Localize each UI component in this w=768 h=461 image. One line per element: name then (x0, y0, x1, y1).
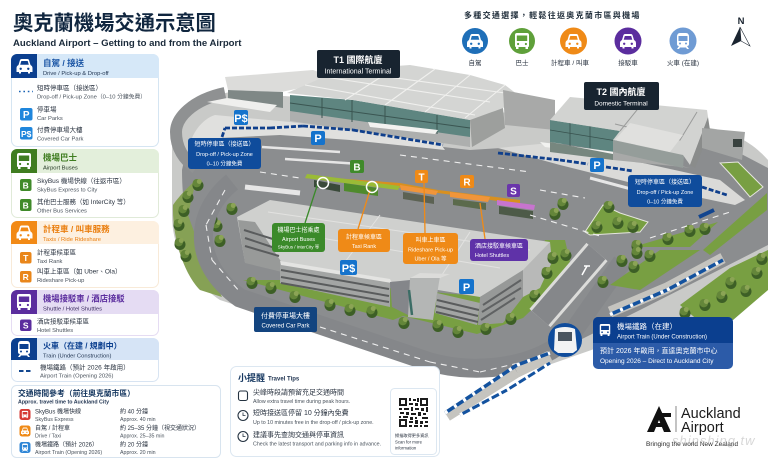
legend: covered car park: 付費停車場大樓 (37, 125, 83, 134)
subtitle: Auckland Airport – Getting to and from the Airport (13, 38, 242, 49)
legend: drop-off zone (19, 83, 146, 100)
row: SkyBus: 約 40 分鐘 (120, 408, 148, 416)
marker: P$ car park: P$ (342, 263, 355, 275)
label: drop-off zone left: Drop-off / Pick-up Zone (196, 152, 253, 158)
label: airport buses: SkyBus / InterCity 等 (278, 244, 320, 250)
rail white ticks (445, 260, 723, 415)
QR box: information (395, 446, 417, 450)
islands and trees right side (550, 162, 767, 255)
legend: airport train: 機場鐵路（預計 2026 年啟用） (40, 362, 130, 372)
airport map illustration (172, 65, 768, 374)
car park surrounding lawn (243, 240, 570, 334)
label: drop-off zone left: 0–10 分鐘免費 (207, 160, 243, 168)
panel: buses: Airport Buses (43, 166, 78, 172)
legend: taxi rank (20, 248, 76, 265)
tip 1 (238, 388, 350, 405)
label: covered car park (254, 307, 317, 332)
legend: other buses: B (23, 200, 29, 210)
icon: train (667, 28, 699, 67)
callout: airport train: Opening 2026 – Direct to Auckland City (600, 358, 714, 365)
callout: airport train (593, 317, 733, 369)
label: T1 International Terminal (317, 50, 400, 78)
stair tower (408, 276, 440, 320)
legend: car parks: 停車場 (37, 104, 57, 114)
label: airport buses: 機場巴士搭乘處 (277, 226, 320, 234)
marker: P T2 (590, 158, 604, 172)
label: rideshare pick-up: 叫車上車區 (415, 236, 446, 244)
legend: hotel shuttles: Hotel Shuttles (37, 328, 73, 334)
lawn and trees lower right (598, 247, 768, 322)
tip 1: Allow extra travel time during peak hours. (253, 399, 350, 405)
dashed route T2 (498, 153, 727, 195)
QR box: Scan for more (395, 440, 423, 444)
land base (172, 92, 768, 374)
panel: train: 火車（在建 / 規劃中） (43, 340, 122, 350)
lane markings (245, 147, 650, 194)
ramp road (540, 252, 597, 318)
legend: drop-off zone: 短時停車區（接送區） (37, 83, 102, 92)
heading: transport options: 多種交通選擇，輕鬆往返奧克蘭市區與機場 (464, 10, 641, 20)
callout: airport train: Airport Train (Under Construction) (617, 334, 707, 340)
legend: taxi rank: Taxi Rank (37, 259, 63, 265)
panel: taxis: 計程車 / 叫車服務 (43, 224, 110, 234)
tip 3 (238, 430, 381, 448)
marker: T: T (418, 172, 425, 184)
row: drive (20, 424, 200, 440)
ring road around car park (203, 182, 622, 368)
T2 domestic terminal building (540, 97, 745, 168)
label: T1 International Terminal: T1 國際航廈 (333, 54, 383, 65)
label: rideshare pick-up (403, 233, 458, 264)
T1 canopy (368, 122, 438, 134)
covered car park building (237, 200, 552, 325)
label: hotel shuttles (470, 239, 528, 261)
roof deck (237, 200, 550, 297)
icon: shuttle (614, 28, 642, 67)
legend: rideshare: Rideshare Pick-up (37, 278, 84, 284)
panel: buses (11, 149, 159, 218)
marker: P$ T1: P$ (234, 113, 248, 125)
right block (435, 293, 480, 325)
row: drive: 約 25–35 分鐘（視交通狀況） (120, 424, 200, 432)
legend: rideshare (20, 266, 122, 284)
panel: travel tips: Travel Tips (268, 376, 300, 382)
label: rideshare pick-up: Uber / Ola 等 (414, 254, 447, 262)
icon: bus: 巴士 (516, 58, 529, 67)
panel: train (11, 338, 159, 382)
label: drop-off zone right: 短時停車區（接送區） (635, 178, 695, 186)
row: train: Airport Train (Opening 2026) (35, 450, 102, 456)
Auckland Airport logo (646, 406, 741, 448)
legend: SkyBus (20, 176, 126, 194)
panel: drive (11, 54, 159, 146)
icon: drive (462, 28, 488, 67)
tip 3: 建議事先查詢交通與停車資訊 (253, 430, 344, 439)
road surface (182, 124, 768, 362)
row: drive: Approx. 25–35 min (120, 434, 165, 440)
T1 international terminal building (287, 65, 522, 147)
marker: R (460, 175, 474, 188)
watermark: shinshing.tw (672, 433, 756, 448)
panel: train: Train (Under Construction) (43, 354, 111, 360)
legend: covered car park: Covered Car Park (37, 136, 83, 142)
QR box (390, 388, 436, 454)
panel: shuttles: Shuttle / Hotel Shuttles (43, 306, 102, 312)
left block (238, 220, 282, 272)
row: train (20, 440, 156, 456)
panel: shuttles (11, 290, 159, 336)
marker: B: B (353, 162, 361, 174)
callout: airport train: 機場鐵路（在建） (617, 321, 677, 331)
legend: hotel shuttles (20, 316, 90, 334)
marker: P$ car park (340, 260, 357, 275)
train icon circle (548, 323, 582, 357)
two-way arrow (699, 210, 714, 217)
QR code (399, 398, 428, 427)
label: drop-off zone right: 0–10 分鐘免費 (647, 198, 683, 206)
label: T2 Domestic Terminal (584, 82, 659, 110)
tip 3: Check the latest transport and parking info in advance. (253, 442, 381, 448)
row: train: 約 20 分鐘 (120, 440, 148, 448)
marker: S: S (510, 186, 517, 198)
Auckland Airport logo: Auckland (681, 406, 741, 422)
rail line lower (460, 363, 550, 415)
label: hotel shuttles: 酒店接駁車候車區 (475, 242, 523, 250)
label: T1 International Terminal: International Terminal (325, 68, 392, 76)
legend: rideshare: R (23, 272, 29, 282)
left lawn with trees (173, 179, 238, 297)
callout lines (305, 178, 485, 239)
panel: taxis (11, 221, 159, 288)
icon: train: 火車 (在建) (667, 58, 699, 67)
marker: P car park (459, 279, 474, 294)
label: covered car park: Covered Car Park (261, 324, 311, 330)
legend: SkyBus: SkyBus 機場快線（往返市區） (37, 176, 126, 185)
QR box: 掃描取得更多資訊 (395, 432, 429, 439)
label: T2 Domestic Terminal: T2 國內航廈 (596, 86, 646, 97)
row: train: Approx. 20 min (120, 450, 156, 456)
legend: airport train (19, 362, 130, 380)
legend: other buses (20, 197, 130, 214)
label: airport buses (272, 223, 325, 252)
rail track bed (447, 258, 723, 416)
legend: other buses: 其他巴士服務（如 InterCity 等） (37, 197, 130, 206)
north arrow (731, 16, 750, 46)
marker: P T1: P (314, 133, 322, 145)
tip 1: 尖峰時段請預留充足交通時間 (253, 388, 344, 396)
icon: bus (509, 28, 535, 67)
bus stops (305, 174, 535, 219)
panel: travel times: 交通時間參考（前往奧克蘭市區） (18, 388, 135, 398)
icon: shuttle: 接駁車 (618, 58, 638, 67)
label: hotel shuttles: Hotel Shuttles (475, 253, 509, 259)
marker: P T1 (311, 131, 325, 145)
row: SkyBus: SkyBus Express (35, 417, 74, 423)
T2 forecourt (498, 143, 745, 205)
label: drop-off zone left: 短時停車區（接送區） (194, 140, 255, 148)
trees around car park (246, 249, 572, 338)
tip 2 (238, 408, 374, 426)
row: train: 機場鐵路（預計 2026） (35, 440, 98, 448)
title: 奧克蘭機場交通示意圖 (13, 11, 216, 35)
north arrow: N (738, 16, 745, 27)
Auckland Airport logo: Airport (681, 420, 724, 436)
centre deck (280, 263, 390, 307)
marker: P T2: P (593, 160, 601, 172)
label: taxi rank: 計程車候車區 (346, 233, 382, 241)
left canopy (207, 98, 277, 112)
marker: R: R (463, 178, 471, 188)
panel: travel times (12, 386, 220, 458)
Auckland Airport logo: Bringing the world New Zealand (646, 441, 739, 448)
label: rideshare pick-up: Rideshare Pick-up (408, 248, 453, 254)
legend: hotel shuttles: S (23, 320, 29, 330)
panel: shuttles: 機場接駁車 / 酒店接駁 (43, 294, 125, 304)
panel: travel times: Approx. travel time to Auckland City (18, 400, 109, 406)
marker: B (350, 160, 364, 174)
label: airport buses: Airport Buses (282, 237, 315, 243)
legend: car parks (20, 104, 63, 122)
legend: rideshare: 叫車上車區（如 Uber、Ola） (37, 266, 122, 276)
icon: taxi: 計程車 / 叫車 (551, 58, 589, 67)
legend: covered car park: P$ (21, 129, 32, 139)
forecourt plaza (192, 115, 445, 150)
callout: airport train: 預計 2026 年啟用，直達奧克蘭市中心 (600, 346, 717, 355)
dashed route T1 (222, 126, 443, 145)
legend: car parks: Car Parks (37, 116, 63, 122)
icon: taxi (551, 28, 589, 67)
T1 connector block (503, 90, 555, 130)
label: drop-off zone left (188, 138, 261, 169)
upper left curved road (176, 93, 225, 168)
legend: car parks: P (23, 110, 30, 121)
legend: other buses: Other Bus Services (37, 208, 87, 214)
rail line upper (445, 260, 723, 413)
row: drive: Drive / Taxi (35, 434, 61, 440)
legend: covered car park (20, 125, 83, 142)
legend: SkyBus: B (23, 180, 29, 190)
legend: taxi rank: T (23, 253, 29, 263)
legend: hotel shuttles: 酒店接駁車候車區 (37, 316, 90, 326)
panel: taxis: Taxis / Ride Rideshare (43, 237, 101, 243)
panel: drive: 自駕 / 接送 (43, 58, 85, 68)
row: SkyBus (20, 408, 156, 423)
panel: drive: Drive / Pick-up & Drop-off (43, 71, 109, 77)
legend: drop-off zone: Drop-off / Pick-up Zone（0–10 分鐘免費） (37, 92, 146, 100)
label: taxi rank (338, 229, 390, 252)
panel: buses: 機場巴士 (43, 152, 78, 162)
marker: T (415, 170, 428, 184)
marker: P car park: P (463, 282, 470, 294)
label: drop-off zone right (628, 175, 702, 207)
label: covered car park: 付費停車場大樓 (261, 311, 310, 320)
label: T2 Domestic Terminal: Domestic Terminal (594, 100, 648, 108)
T1 left wing (225, 70, 340, 108)
label: drop-off zone right: Drop-off / Pick-up Zone (637, 190, 693, 196)
ring road lane dashes (206, 155, 730, 372)
row: SkyBus: SkyBus 機場快線 (35, 408, 81, 416)
marker: S (507, 184, 520, 198)
tip 2: 短時接送區停留 10 分鐘內免費 (253, 408, 349, 417)
label: taxi rank: Taxi Rank (352, 244, 376, 250)
panel: travel tips: 小提醒 (238, 372, 265, 383)
tip 2: Up to 10 minutes free in the drop-off / pick-up zone. (253, 420, 374, 426)
row: SkyBus: Approx. 40 min (120, 417, 156, 423)
panel: travel tips (230, 366, 440, 456)
row: drive: 自駕 / 計程車 (35, 424, 70, 432)
legend: SkyBus: SkyBus Express to City (37, 188, 97, 194)
legend: airport train: Airport Train (Opening 2026) (40, 374, 114, 380)
icon: drive: 自駕 (468, 58, 482, 67)
legend: taxi rank: 計程車候車區 (37, 248, 76, 256)
